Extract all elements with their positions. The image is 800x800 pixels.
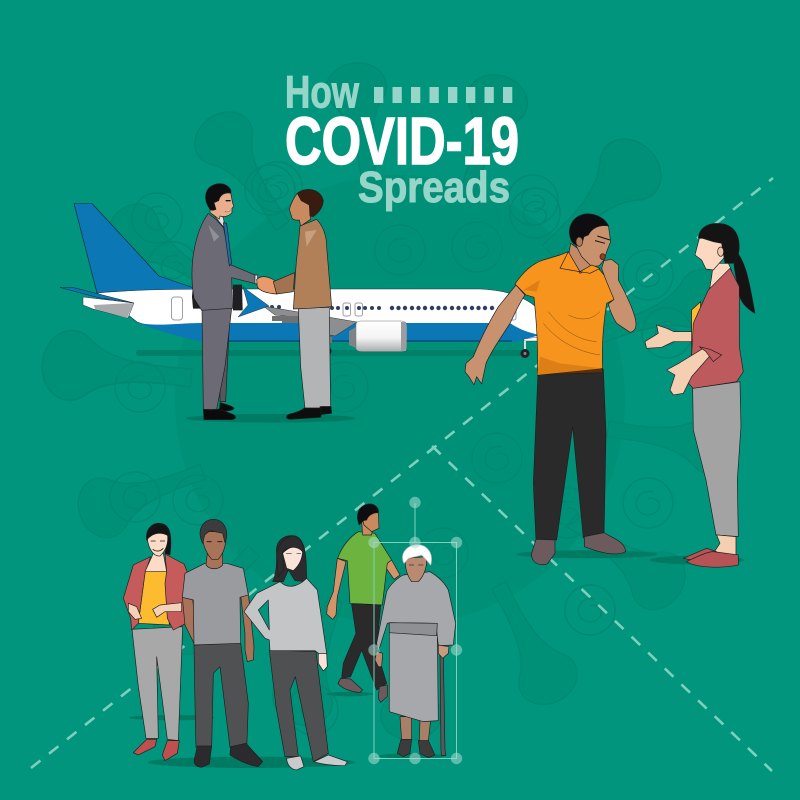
head bbox=[362, 512, 379, 532]
eyes bbox=[409, 564, 423, 566]
mouth bbox=[600, 254, 605, 260]
shirt cuff bbox=[255, 275, 258, 284]
trousers bbox=[533, 369, 606, 540]
trousers bbox=[693, 382, 741, 537]
woman in red blazer bbox=[123, 523, 189, 761]
cuff bbox=[699, 347, 722, 362]
window rows bbox=[270, 305, 494, 310]
right shoe bbox=[584, 533, 626, 554]
blazer left bbox=[123, 557, 151, 630]
sweater bbox=[377, 572, 456, 652]
shoes bbox=[133, 739, 157, 755]
hair bbox=[357, 504, 378, 525]
neck bbox=[708, 263, 732, 297]
right hand on cane bbox=[438, 645, 449, 658]
shoes bbox=[338, 678, 363, 693]
jacket bbox=[293, 219, 332, 309]
lower arm and hand bbox=[667, 348, 711, 395]
legs bbox=[400, 717, 431, 742]
tail fin bbox=[74, 204, 197, 293]
shoes bbox=[194, 746, 212, 767]
right hand bbox=[318, 653, 327, 671]
arm left bbox=[182, 596, 206, 648]
tail stabiliser bbox=[83, 297, 134, 318]
blue belly bbox=[137, 322, 540, 342]
face bbox=[575, 225, 611, 267]
nose landing gear bbox=[520, 337, 539, 358]
trousers bbox=[269, 650, 328, 762]
yellow top bbox=[138, 572, 169, 625]
neck bbox=[568, 243, 592, 273]
arm right bbox=[384, 558, 400, 579]
eyes bbox=[207, 540, 222, 543]
extended arm and hand bbox=[645, 325, 692, 348]
shoes bbox=[397, 739, 412, 757]
mid doors bbox=[343, 303, 516, 320]
t-shirt bbox=[182, 563, 248, 645]
hands shaking bbox=[257, 277, 277, 294]
hair bbox=[206, 184, 231, 210]
hair bbox=[698, 223, 739, 263]
face bbox=[695, 233, 725, 270]
neck and head bbox=[210, 192, 234, 219]
shirt bbox=[515, 252, 614, 375]
hair bbox=[200, 519, 227, 543]
hair fringe bbox=[277, 536, 303, 577]
selection handles bbox=[368, 497, 462, 764]
man in tan jacket bbox=[257, 189, 332, 419]
trousers bbox=[342, 604, 387, 690]
highlight on jacket bbox=[305, 230, 317, 247]
mouth bbox=[225, 210, 231, 212]
elderly woman with cane bbox=[375, 545, 456, 758]
man in grey suit bbox=[192, 184, 258, 420]
left hand bbox=[375, 652, 383, 667]
shirt collar bbox=[560, 252, 600, 273]
belt bbox=[538, 368, 603, 375]
hair back bbox=[273, 536, 307, 582]
title word: Spreads: Spreads bbox=[358, 163, 510, 212]
arm left bbox=[327, 558, 346, 619]
forearm bbox=[153, 603, 182, 617]
hair bbox=[569, 214, 608, 246]
woman in light grey sweater bbox=[244, 536, 347, 770]
trousers bbox=[194, 643, 248, 751]
hair bbox=[297, 189, 323, 217]
sash bbox=[389, 623, 437, 636]
face bbox=[147, 532, 168, 556]
selection box around elderly woman bbox=[368, 497, 462, 764]
main landing gear bbox=[322, 337, 332, 356]
shadows under group bbox=[129, 692, 445, 768]
front shoe bbox=[203, 409, 236, 420]
rear door bbox=[172, 297, 182, 320]
necktie bbox=[223, 223, 232, 266]
head bbox=[203, 532, 226, 559]
man in grey t-shirt bbox=[182, 519, 263, 767]
ear bbox=[576, 237, 583, 246]
suit jacket bbox=[192, 213, 257, 310]
woman listening bbox=[645, 223, 755, 567]
folder bbox=[192, 273, 242, 310]
title bbox=[285, 66, 519, 212]
arm cutout bbox=[258, 600, 269, 630]
left arm bbox=[465, 285, 525, 385]
back shoe bbox=[683, 548, 717, 562]
eyes and smile bbox=[151, 541, 165, 551]
neck bbox=[145, 553, 167, 572]
legs bbox=[713, 535, 736, 555]
dashed transmission lines bbox=[31, 178, 773, 771]
group of people bbox=[123, 504, 456, 770]
wing tip bbox=[238, 287, 269, 317]
eye bbox=[226, 199, 231, 203]
shadow under woman bbox=[649, 556, 744, 564]
airplane bbox=[60, 204, 545, 358]
eyes bbox=[286, 552, 301, 554]
front leg bbox=[202, 308, 232, 409]
front shoe bbox=[687, 552, 738, 567]
closed eye bbox=[595, 236, 610, 243]
shoes bbox=[287, 756, 304, 770]
ear bbox=[718, 247, 724, 256]
shirt bbox=[210, 211, 231, 263]
coughing man bbox=[465, 214, 636, 565]
neck bbox=[206, 553, 223, 569]
back leg bbox=[220, 310, 230, 402]
background virus illustration bbox=[39, 59, 741, 741]
ground shadow under plane bbox=[136, 350, 528, 356]
handshake scene bbox=[185, 184, 356, 423]
wing bbox=[263, 306, 357, 336]
face bbox=[405, 557, 427, 582]
coughing scene bbox=[465, 214, 755, 567]
hand on hip bbox=[265, 630, 285, 639]
ponytail bbox=[734, 250, 755, 313]
shadow under coughing man bbox=[516, 550, 657, 558]
cane bbox=[440, 653, 446, 756]
skirt bbox=[389, 632, 438, 722]
trousers bbox=[298, 307, 331, 409]
arm right bbox=[241, 593, 254, 662]
shoes bbox=[320, 407, 332, 415]
shirt bbox=[338, 532, 392, 605]
man walking in green shirt bbox=[327, 504, 400, 702]
sleeve bbox=[273, 273, 295, 294]
jacket highlight bbox=[208, 225, 219, 242]
title word: How: How bbox=[285, 66, 360, 118]
selection frame bbox=[374, 503, 456, 758]
shirt shadow bbox=[523, 280, 603, 375]
blazer bbox=[688, 268, 743, 388]
sweater bbox=[244, 578, 327, 653]
shirt folds bbox=[543, 312, 600, 355]
neck bbox=[362, 522, 373, 535]
title dotted rule bbox=[374, 87, 512, 103]
trousers bbox=[132, 627, 183, 741]
title word: COVID-19: COVID-19 bbox=[285, 104, 519, 179]
left hand bbox=[128, 603, 142, 619]
white hair bbox=[403, 545, 431, 565]
hair top bbox=[147, 525, 169, 540]
left shoe bbox=[532, 539, 555, 565]
engine bbox=[349, 321, 406, 352]
head and neck bbox=[289, 193, 311, 226]
yellow top bbox=[692, 302, 701, 357]
shadow under businessmen bbox=[185, 414, 356, 423]
blazer right bbox=[165, 554, 189, 630]
fuselage bbox=[97, 289, 545, 341]
forearm and fist bbox=[602, 259, 636, 332]
face bbox=[283, 546, 303, 571]
hair back bbox=[146, 523, 171, 555]
